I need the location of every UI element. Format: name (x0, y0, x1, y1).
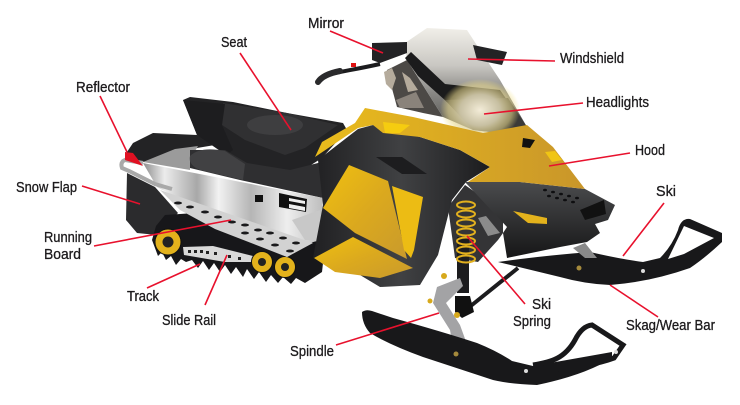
lower seat side (190, 150, 335, 200)
track (152, 210, 325, 284)
label: Running Board: Running (44, 230, 92, 246)
hood (315, 108, 585, 189)
label: Track: Track (127, 289, 160, 305)
leader lines (82, 31, 664, 345)
label: Ski Spring (513, 297, 551, 330)
windshield (405, 28, 527, 135)
label: Reflector: Reflector (76, 80, 130, 96)
steering post (384, 60, 443, 117)
label: Ski Spring: Ski (532, 297, 551, 313)
headlight glow (440, 79, 520, 141)
label: Skag/Wear Bar: Skag/Wear Bar (626, 318, 715, 334)
label: Running Board (44, 230, 92, 263)
label: Spindle: Spindle (290, 344, 334, 360)
right mirror (473, 45, 507, 65)
label: Seat: Seat (221, 35, 247, 51)
snow flap (126, 173, 178, 235)
ski spring (457, 202, 475, 262)
rear tail body (125, 133, 215, 162)
label: Snow Flap: Snow Flap (16, 180, 77, 196)
suspension arm (462, 268, 518, 313)
left mirror (372, 42, 407, 63)
rear ski (498, 219, 722, 285)
tail ramp (143, 146, 198, 170)
spindle (428, 273, 468, 347)
spring bay (448, 185, 503, 262)
running board panel (143, 163, 323, 257)
side body (313, 125, 490, 287)
label: Ski: Ski (656, 184, 676, 200)
seat (183, 97, 347, 172)
front ski (362, 310, 623, 385)
slide rail (183, 246, 253, 262)
shock absorber (455, 237, 474, 318)
nose (465, 182, 615, 258)
label: Ski Spring: Spring (513, 314, 551, 330)
label: Slide Rail: Slide Rail (162, 313, 216, 329)
side vent (376, 157, 427, 174)
label: Mirror: Mirror (308, 16, 344, 32)
grab rail (121, 160, 172, 189)
label: Headlights: Headlights (586, 95, 649, 111)
label: Hood: Hood (635, 143, 665, 159)
label: Windshield: Windshield (560, 51, 624, 67)
reflector (125, 152, 143, 166)
yellow side panels (314, 165, 423, 278)
label: Running Board: Board (44, 247, 81, 263)
seat side pad (190, 149, 245, 180)
handlebar (318, 63, 380, 82)
track wheels (155, 229, 296, 278)
